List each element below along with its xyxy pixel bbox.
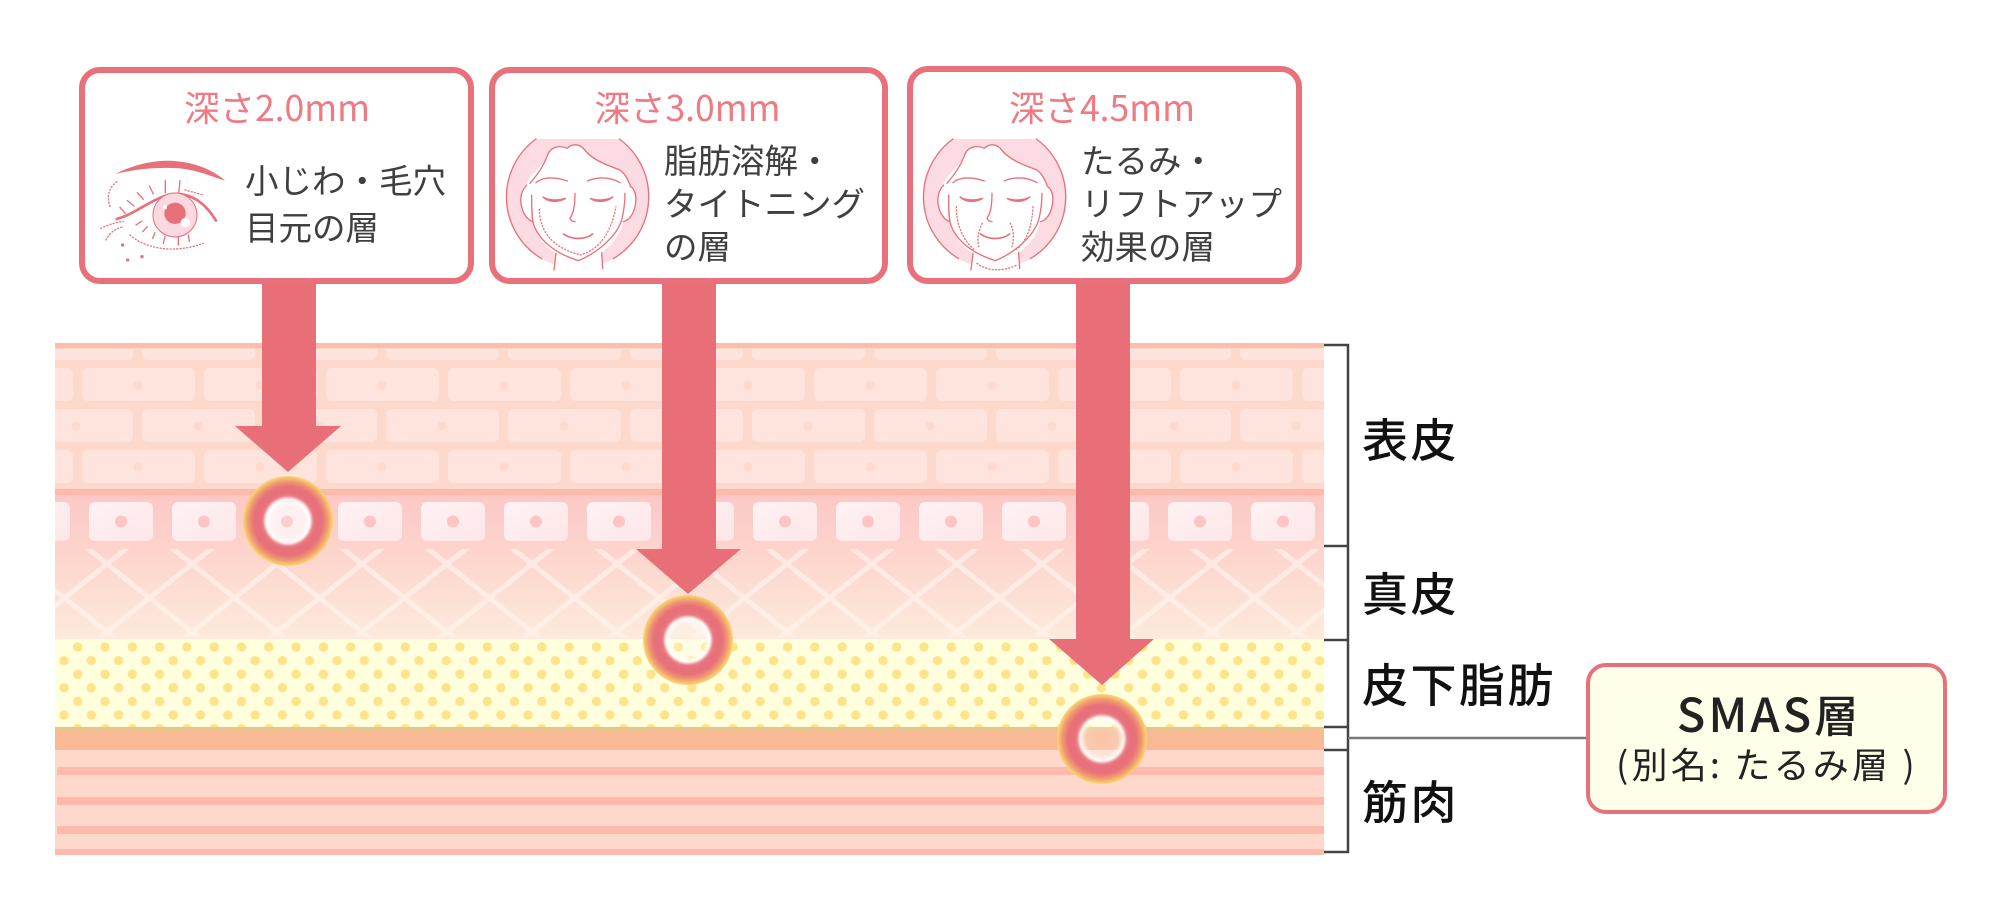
bracket: layer ranges [1324, 345, 1348, 852]
card text: 3.0mm: の層 [664, 220, 731, 269]
icon: face with sagging lines [923, 125, 1066, 273]
card: depth 3.0mm [492, 70, 885, 281]
connector line to SMAS callout [1348, 737, 1588, 739]
card text: 2.0mm: 小じわ・毛穴 [245, 154, 446, 203]
label: epidermis: 表皮 [1362, 405, 1459, 471]
card text: 4.5mm: たるみ・ [1081, 134, 1215, 183]
arrow: 4.5mm [1049, 284, 1154, 685]
layer: dermis [55, 495, 1324, 639]
callout: SMAS layer [1588, 665, 1945, 812]
label: dermis: 真皮 [1362, 559, 1459, 625]
card title: 4.5mm: 深さ4.5mm [1009, 81, 1195, 132]
label: subcutaneous fat: 皮下脂肪 [1362, 650, 1556, 716]
icon: face with jaw contour [506, 125, 649, 273]
card title: 3.0mm: 深さ3.0mm [594, 81, 781, 132]
card title: 2.0mm: 深さ2.0mm [184, 81, 370, 132]
panel: skin cross-section [55, 343, 1324, 855]
target ring: 4.5mm [1057, 694, 1147, 784]
card: depth 2.0mm [82, 70, 471, 281]
layer: epidermis [55, 343, 1324, 495]
target ring: 2.0mm [243, 476, 333, 566]
arrow: 2.0mm [235, 284, 341, 472]
icon: eye [101, 161, 225, 262]
layer: SMAS [55, 727, 1324, 750]
callout alias: (別名: たるみ層 ) [1616, 737, 1918, 789]
callout heading: SMAS層 [1677, 677, 1861, 746]
card text: 3.0mm: 脂肪溶解・ [664, 134, 832, 183]
card text: 4.5mm: リフトアップ [1081, 177, 1282, 226]
arrow: 3.0mm [636, 284, 741, 594]
card text: 3.0mm: タイトニング [664, 177, 865, 226]
card text: 4.5mm: 効果の層 [1081, 220, 1215, 269]
label: muscle: 筋肉 [1362, 767, 1459, 833]
target ring: 3.0mm [643, 595, 733, 685]
card text: 2.0mm: 目元の層 [245, 201, 379, 250]
card: depth 4.5mm [910, 69, 1299, 281]
layer: muscle [55, 750, 1324, 855]
layer: subcutaneous fat [55, 639, 1324, 727]
